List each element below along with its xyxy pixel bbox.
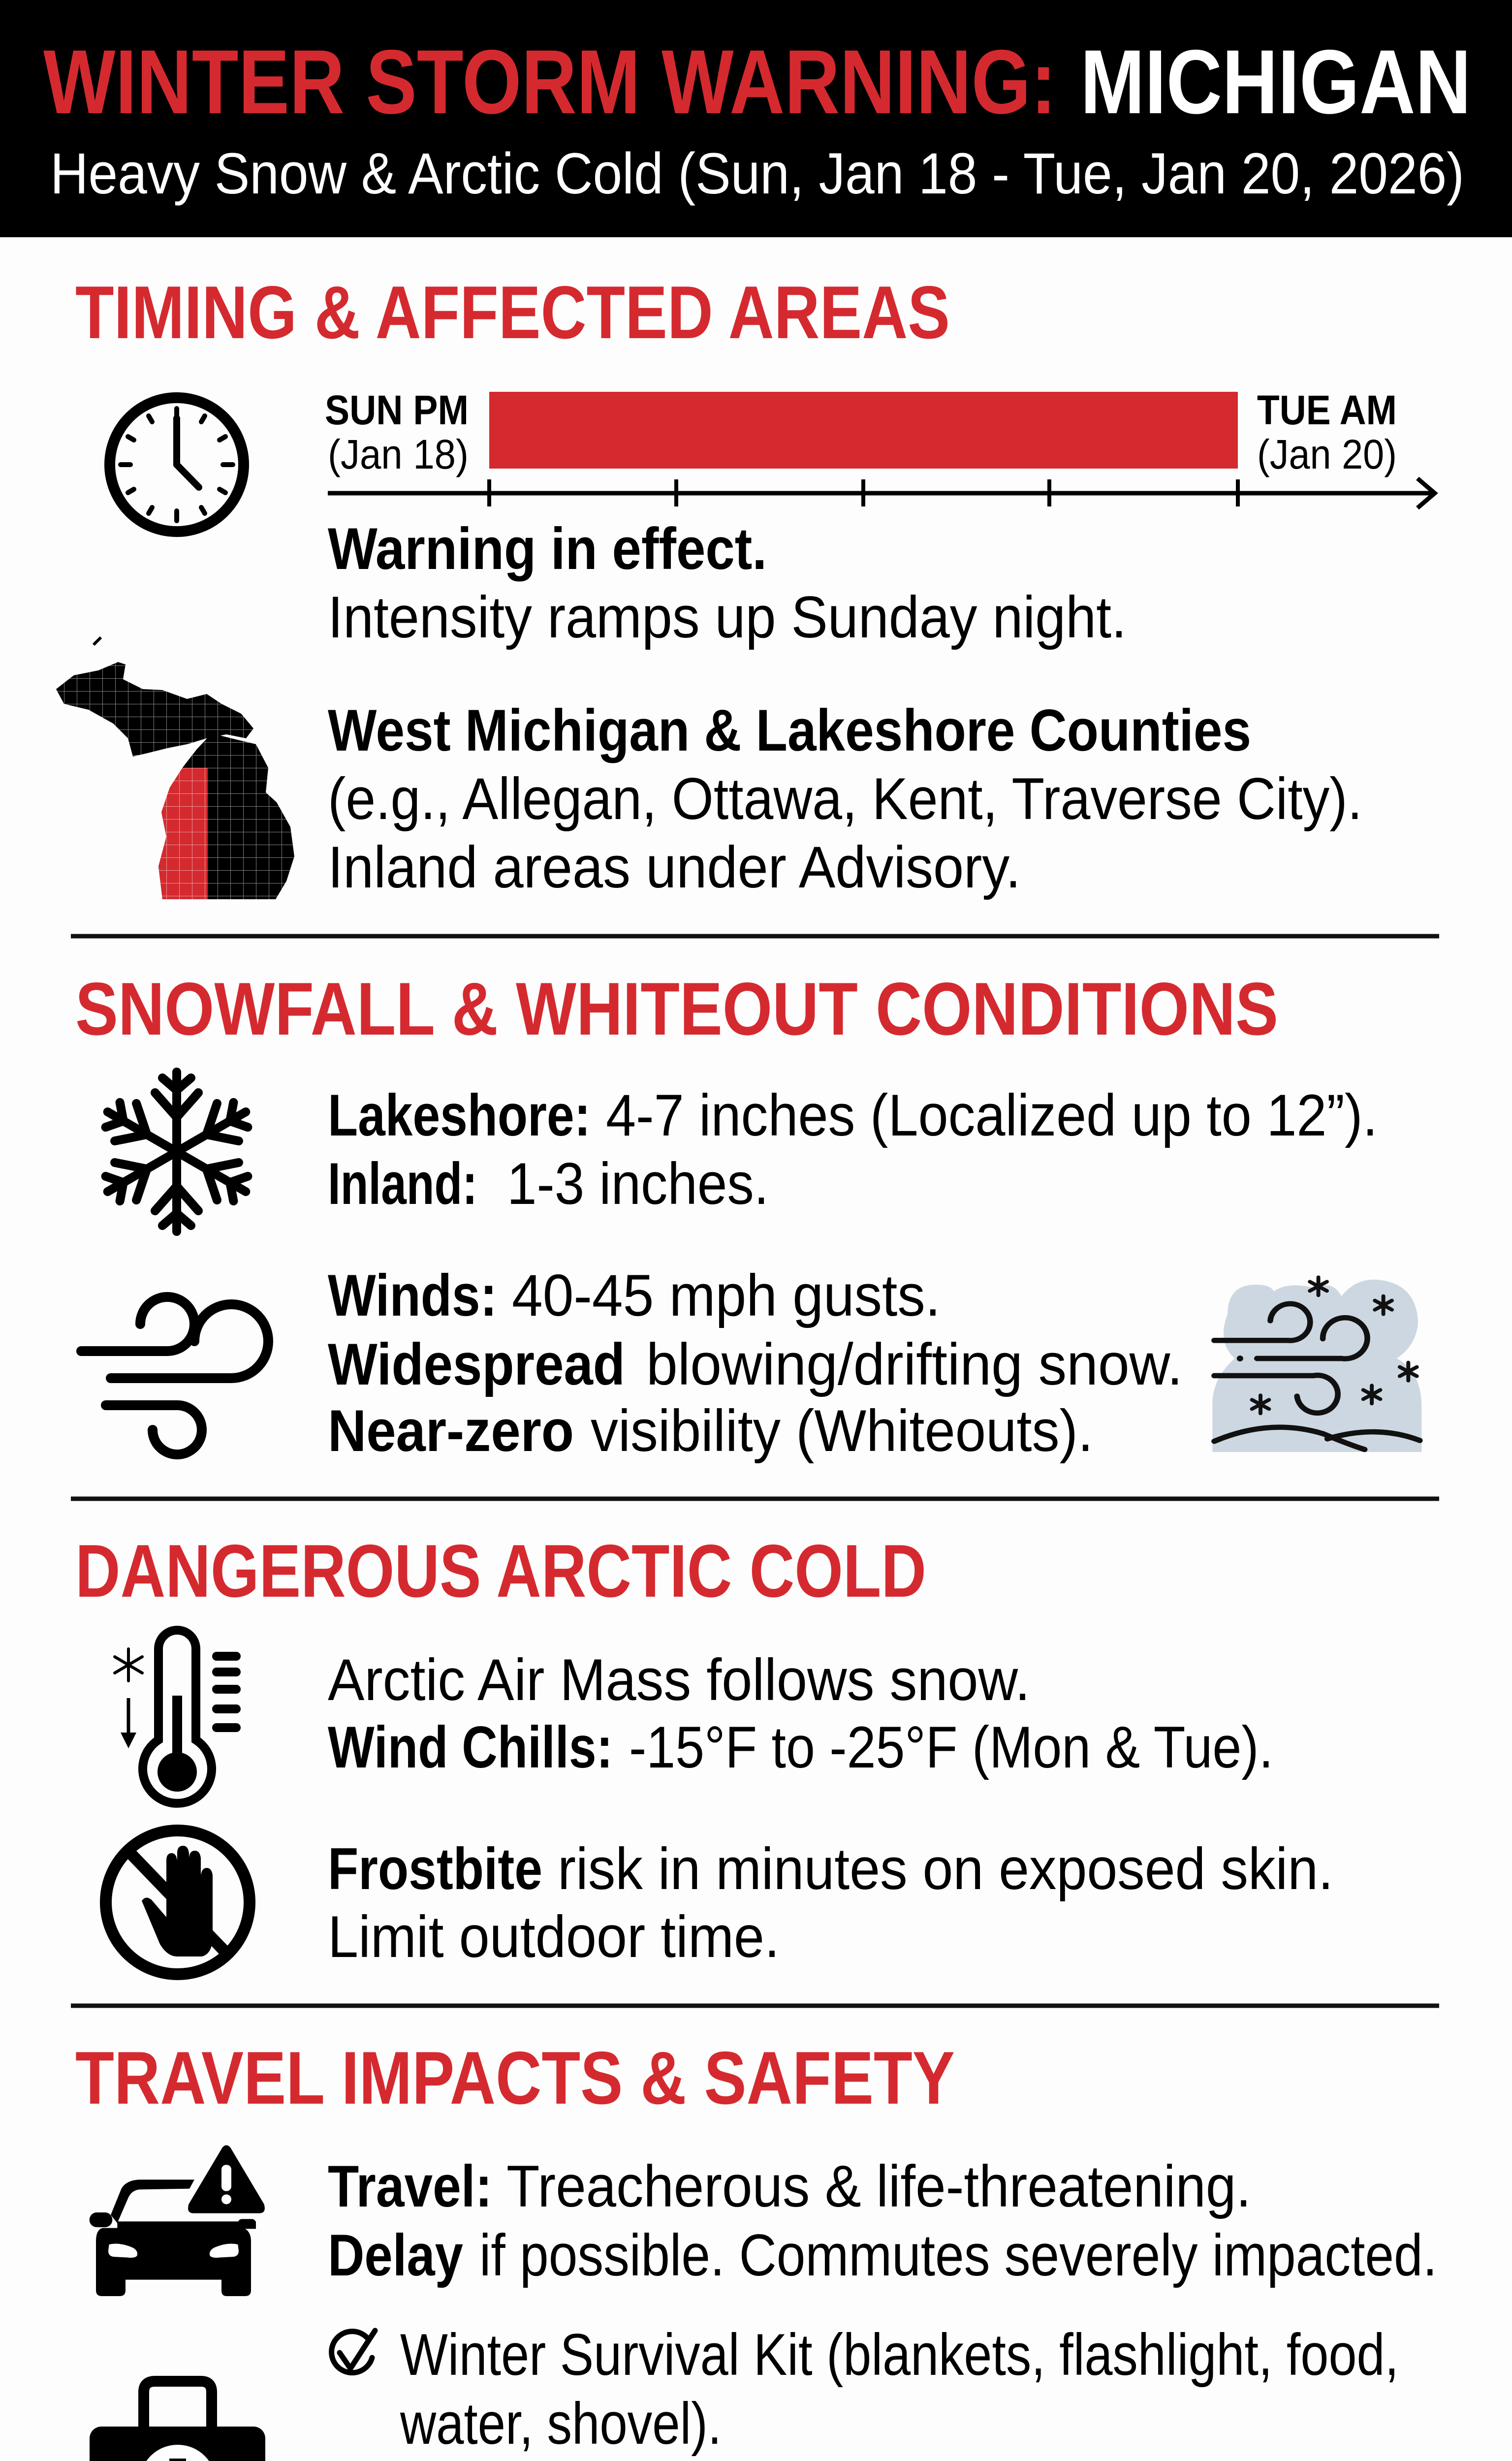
text: snowfall amounts [328, 1082, 1378, 1217]
text: arctic air: Arctic Air Mass follows snow. [328, 1647, 1030, 1713]
text: frostbite: Frostbite [328, 1836, 542, 1902]
icon: thermometer [115, 1630, 236, 1803]
text: snowfall amounts: 1-3 inches. [507, 1151, 769, 1217]
icon: michigan map [56, 637, 305, 906]
icon: wind [81, 1297, 268, 1454]
text: warning in effect: Intensity ramps up Sunday night. [328, 584, 1127, 650]
timeline chart: SUN PM [325, 387, 469, 433]
text: frostbite [328, 1836, 1333, 1970]
text: affected areas: West Michigan & Lakeshore Counties [328, 697, 1251, 763]
text: winds: Near-zero [328, 1398, 574, 1464]
text: arctic air: Wind Chills: [328, 1714, 613, 1780]
text: warning in effect [328, 516, 1127, 650]
text: frostbite: risk in minutes on exposed skin. [558, 1836, 1333, 1902]
text: affected areas: (e.g., Allegan, Ottawa, Kent, Traverse City). [328, 766, 1362, 832]
heading: arctic cold: DANGEROUS ARCTIC COLD [75, 1529, 926, 1613]
text: affected areas [328, 697, 1362, 900]
icon: clock [110, 398, 244, 532]
icon: snow cloud [1212, 1277, 1421, 1452]
text: winds: Widespread [328, 1331, 625, 1397]
text: arctic air: -15°F to -25°F (Mon & Tue). [629, 1714, 1273, 1780]
heading: timing: TIMING & AFFECTED AREAS [75, 271, 950, 354]
text: snowfall amounts: Lakeshore: [328, 1082, 591, 1148]
text: winds: blowing/drifting snow. [646, 1331, 1183, 1397]
text: travel [328, 2153, 1437, 2288]
text: winds: Winds: [328, 1262, 497, 1328]
text: arctic air [328, 1647, 1273, 1780]
heading: snowfall: SNOWFALL & WHITEOUT CONDITIONS [75, 967, 1278, 1051]
timeline chart: (Jan 18) [328, 431, 469, 477]
text: travel: Delay [328, 2222, 463, 2288]
text: snowfall amounts: 4-7 inches (Localized up to 12”). [606, 1082, 1378, 1148]
text: travel: Treacherous & life-threatening. [506, 2153, 1251, 2219]
heading: travel: TRAVEL IMPACTS & SAFETY [75, 2036, 955, 2120]
timeline chart: TUE AM [1257, 387, 1397, 433]
text: warning in effect: Warning in effect. [328, 516, 767, 582]
timeline chart: (Jan 20) [1257, 431, 1397, 477]
icon: snowflake [97, 1072, 256, 1231]
icon: car warning [90, 2145, 265, 2296]
checklist [332, 2322, 1399, 2461]
text: winds [328, 1262, 1183, 1464]
icon: no touch hand [106, 1830, 250, 1974]
header [0, 0, 1512, 237]
icon: first aid kit [90, 2381, 265, 2461]
text: snowfall amounts: Inland: [328, 1151, 477, 1217]
title: WINTER STORM WARNING: [43, 32, 1056, 133]
checklist: water, shovel). [400, 2391, 722, 2457]
text: affected areas: Inland areas under Advisory. [328, 834, 1021, 900]
text: frostbite: Limit outdoor time. [328, 1904, 780, 1970]
text: winds: visibility (Whiteouts). [591, 1398, 1093, 1464]
timeline chart [325, 387, 1435, 508]
text: travel: Travel: [328, 2153, 492, 2219]
text: winds: 40-45 mph gusts. [512, 1262, 941, 1328]
